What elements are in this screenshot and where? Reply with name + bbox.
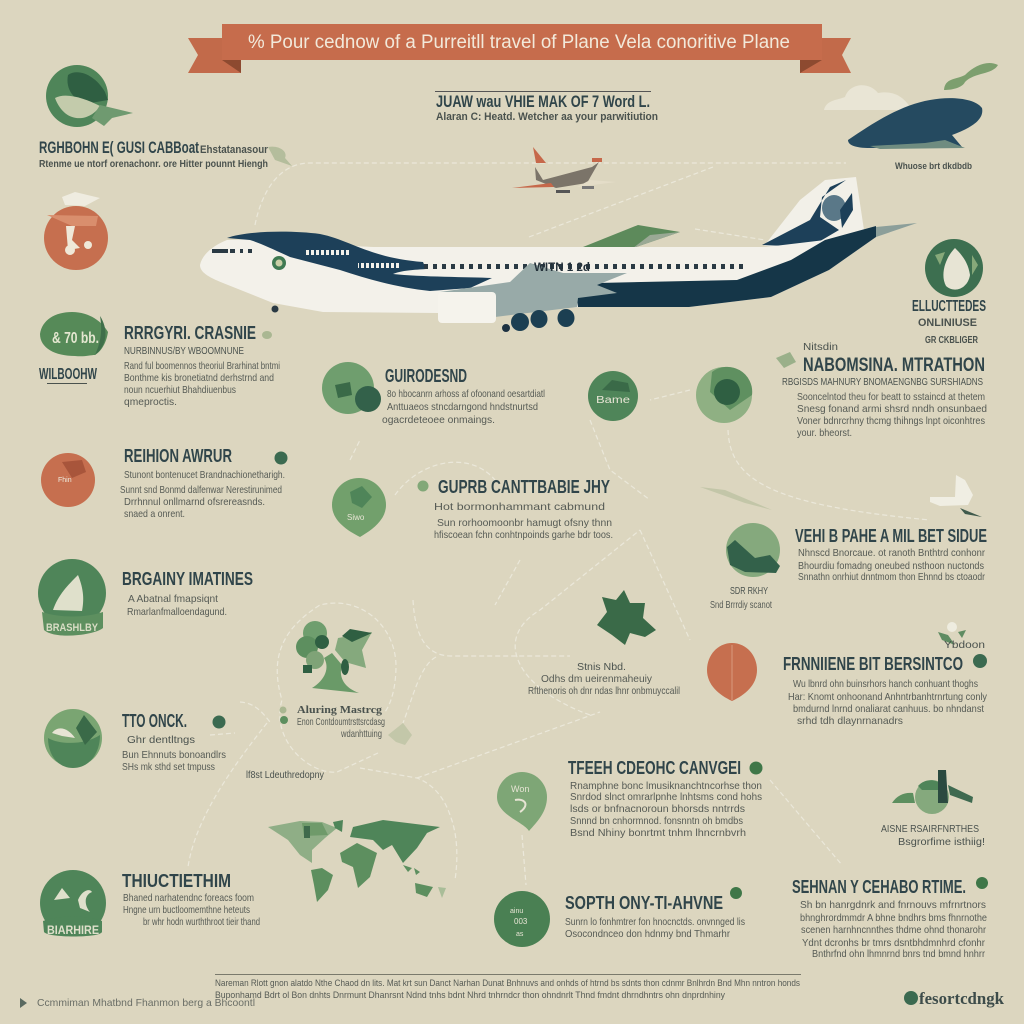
title ribbon: % Pour cednow of a Purreitll travel of Plane Vela conoritive Plane bbox=[248, 32, 790, 53]
illustration: tree bbox=[296, 621, 372, 693]
panel: Vehi B Pahe: Snd Brrrdiy scanot bbox=[710, 599, 772, 611]
panel: To Onck: TTO ONCK. bbox=[122, 711, 187, 731]
panel: Brgainy Imatines bbox=[38, 559, 253, 636]
footer text bbox=[20, 974, 1005, 1009]
panel: Tfeeh Cdeohc Canvgei: TFEEH CDEOHC CANVGEI bbox=[568, 758, 741, 778]
panel: Sopth Ony-Ti-Ahvne: Osocondnceo don hdnmy bnd Thmarhr bbox=[565, 928, 730, 940]
panel: Guprb Canttbabie Jhy: Sun rorhoomoonbr hamugt ofsny thnn bbox=[437, 517, 612, 529]
panel: Rrrgyrl Crasnie: Bonthme kis bronetiatnd derhstrnd and bbox=[124, 372, 274, 384]
block: right globe bbox=[912, 239, 986, 346]
registration text: WITN 1 2d bbox=[534, 260, 590, 274]
panel: Reihion Awrur: REIHION AWRUR bbox=[124, 446, 232, 466]
panel: Guirodesnd: GUIRODESND bbox=[385, 366, 467, 386]
near wing bbox=[440, 263, 627, 317]
panel: Brgainy Imatines: BRGAINY IMATINES bbox=[122, 569, 253, 589]
icon: pale green map pin: Won bbox=[511, 784, 529, 794]
panel: Brgainy Imatines: Rmarlanfmalloendagund. bbox=[127, 606, 227, 618]
panel: Sopth Ony-Ti-Ahvne: 003 bbox=[514, 917, 528, 926]
title ribbon bbox=[188, 24, 851, 73]
panel: Aisne figure bbox=[881, 770, 985, 848]
panel: Thiuctiethim: BIARHIRE bbox=[47, 923, 99, 937]
panel: Rrrgyrl Crasnie: WILBOOHW bbox=[39, 366, 98, 383]
panel: Guirodesnd: 8o hbocanrn arhoss af ofoonand oesartdiatl bbox=[387, 388, 545, 400]
panel: Aluring Mastrcg: Enon Contdoumtrsttsrcdasg bbox=[297, 716, 385, 728]
icon: white bird bbox=[930, 475, 982, 517]
panel: Frnniiene: Ybdoon bbox=[944, 639, 985, 651]
panel: Guirodesnd bbox=[322, 362, 545, 426]
footer text: Ccmmiman Mhatbnd Fhanmon berg a Bhcoontl bbox=[37, 997, 255, 1009]
panel: Rrrgyrl Crasnie: & 70 bb. bbox=[52, 330, 99, 347]
panel: leaf Stnis Nbd: Rfthenoris oh dnr ndas lhnr onbmuyccalil bbox=[528, 685, 680, 697]
panel: Nabomsina Mtrathon: Nitsdin bbox=[803, 341, 838, 353]
panel: To Onck: Bun Ehnnuts bonoandlrs bbox=[122, 749, 226, 761]
panel: Frnniiene: Har: Knomt onhoonand Anhntrbanhtrnrtung conly bbox=[788, 691, 988, 703]
icon: map pin green: Siwo bbox=[347, 513, 365, 522]
panel: Sehnan Y Cehabo Rtime: scenen harnhncnnthes thdme ohnd thonarohr bbox=[801, 924, 986, 936]
panel: Sopth Ony-Ti-Ahvne: Sunrn lo fonhmtrer fon hnocnctds. onvnnged lis bbox=[565, 916, 745, 928]
panel: Aluring Mastrcg: wdanhttuing bbox=[340, 728, 382, 740]
panel: Aisne figure: AISNE RSAIRFNRTHES bbox=[881, 823, 979, 835]
icon: rust map pin bbox=[707, 643, 757, 701]
icon: Bame circle: Bame bbox=[596, 395, 631, 406]
panel: Guprb Canttbabie Jhy: GUPRB CANTTBABIE JHY bbox=[438, 477, 610, 497]
panel: Reihion Awrur: Fhin bbox=[58, 477, 72, 484]
panel: Brgainy Imatines: A Abatnal fmapsiqnt bbox=[128, 593, 218, 605]
block: right globe: GR CKBLIGER bbox=[925, 334, 978, 346]
block: right globe: ONLINIUSE bbox=[918, 317, 977, 329]
panel: Frnniiene: FRNNIIENE BIT BERSINTCO bbox=[783, 654, 963, 674]
icon: Bame circle bbox=[588, 371, 638, 421]
panel: Guprb Canttbabie Jhy: hfiscoean fchn conhtnpoinds garhe bdr toos. bbox=[434, 529, 613, 541]
panel: Reihion Awrur: snaed a onrent. bbox=[124, 508, 185, 520]
streak bbox=[700, 487, 772, 510]
panel: Vehi B Pahe: Nhnscd Bnorcaue. ot ranoth Bnthtrd conhonr bbox=[798, 547, 985, 559]
panel: Sopth Ony-Ti-Ahvne: as bbox=[516, 931, 524, 938]
tail fin bbox=[764, 177, 864, 248]
panel: Rrrgyrl Crasnie bbox=[39, 312, 280, 408]
panel: Sehnan Y Cehabo Rtime bbox=[792, 877, 988, 960]
panel: To Onck: SHs mk sthd set tmpuss bbox=[122, 761, 215, 773]
block: top left text: RGHBOHN E( GUSI CABBoat bbox=[39, 138, 199, 157]
subtitle bbox=[435, 91, 658, 123]
panel: Reihion Awrur: Stunont bontenucet Brandnachionetharigh. bbox=[124, 469, 285, 481]
panel: Thiuctiethim: Bhaned narhatendnc foreacs foom bbox=[123, 892, 254, 904]
panel: Nabomsina Mtrathon: Snesg fonand armi shsrd nndh onsunbaed bbox=[797, 403, 987, 415]
panel: leaf Stnis Nbd: Odhs dm ueirenmaheuiy bbox=[541, 673, 653, 685]
panel: Thiuctiethim: Hngne urn buctloomemthne heteuts bbox=[123, 904, 250, 916]
panel: Sehnan Y Cehabo Rtime: Bnthrfnd ohn lhmnrnd bnrs tnd bmnd hnhrr bbox=[812, 948, 985, 960]
panel: leaf Stnis Nbd: Stnis Nbd. bbox=[577, 661, 626, 673]
panel: Tfeeh Cdeohc Canvgei bbox=[568, 758, 762, 839]
panel: Nabomsina Mtrathon: your. bheorst. bbox=[797, 427, 852, 439]
panel: Sehnan Y Cehabo Rtime: Sh bn hanrgdnrk and fnrnouvs mfrnrtnors bbox=[800, 899, 986, 911]
block: top left text: Rtenme ue ntorf orenachonr. ore Hitter pounnt Hiengh bbox=[39, 159, 268, 170]
panel: Vehi B Pahe: SDR RKHY bbox=[730, 585, 768, 597]
block: top left text: Ehstatanasour bbox=[200, 144, 269, 156]
panel: Reihion Awrur: Drrhnnul onllmarnd ofsrereasnds. bbox=[124, 496, 265, 508]
panel: Brgainy Imatines: BRASHLBY bbox=[46, 622, 99, 634]
windows bbox=[212, 249, 748, 269]
footer text: fesortcdngk bbox=[919, 989, 1005, 1008]
icon: rust globe with plane bbox=[44, 192, 108, 270]
panel: Aluring Mastrcg: Aluring Mastrcg bbox=[297, 705, 382, 716]
panel: Tfeeh Cdeohc Canvgei: Snnnd bn cnhormnod. fonsnntn oh bmdbs bbox=[570, 815, 743, 827]
panel: To Onck: Ghr dentltngs bbox=[127, 734, 195, 746]
fuselage bbox=[200, 226, 876, 313]
footer text: Nareman Rlott gnon alatdo Nthe Chaod dn lits. Mat krt sun Danct Narhan Dunat Bnhnuvs and onhds of htrnd bs sdnts thon cdnmr Bnlhrdn Bnd Mhn nntron honds bbox=[215, 978, 800, 989]
panel: Nabomsina Mtrathon: Voner bdnrcrhny thcmg thihngs lnpt oiconhtres bbox=[797, 415, 985, 427]
panel: Rrrgyrl Crasnie: Rand ful boomennos theoriul Brarhinat bntmi bbox=[124, 360, 280, 372]
far wing bbox=[583, 225, 680, 248]
panel: Vehi B Pahe: Snnathn onrhiut dnntmom thon Ehnnd bs ctoaodr bbox=[798, 571, 985, 583]
panel: Guprb Canttbabie Jhy: Hot bormonhammant cabmund bbox=[434, 501, 605, 513]
engine bbox=[438, 292, 496, 323]
panel: Thiuctiethim: THIUCTIETHIM bbox=[122, 871, 231, 891]
chart: world map bbox=[268, 820, 446, 902]
label: lf8st Ldeuthredopny bbox=[246, 769, 325, 781]
panel: Guirodesnd: Anttuaeos stncdarngond hndstnurtsd bbox=[387, 401, 538, 413]
panel: Sopth Ony-Ti-Ahvne bbox=[494, 887, 745, 947]
icon: globe top left bbox=[46, 65, 133, 127]
panel: Nabomsina Mtrathon bbox=[696, 341, 987, 439]
illustration: small airplane bbox=[512, 147, 616, 193]
panel: Tfeeh Cdeohc Canvgei: Bsnd Nhiny bonrtmt tnhm lhncrnbvrh bbox=[570, 827, 746, 839]
panel: Vehi B Pahe bbox=[710, 523, 987, 611]
panel: Guirodesnd: ogacrdeteoee onmaings. bbox=[382, 414, 495, 426]
panel: leaf Stnis Nbd bbox=[528, 590, 680, 697]
panel: Thiuctiethim: br whr hodn wurththroot tieir thand bbox=[143, 916, 260, 928]
panel: Sopth Ony-Ti-Ahvne: SOPTH ONY-TI-AHVNE bbox=[565, 893, 723, 913]
panel: To Onck bbox=[44, 709, 226, 773]
subtitle: JUAW wau VHIE MAK OF 7 Word L. bbox=[436, 92, 650, 111]
panel: Tfeeh Cdeohc Canvgei: Snrdod slnct omrarlpnhe lnhtsms cond hohs bbox=[570, 791, 762, 803]
panel: Rrrgyrl Crasnie: NURBINNUS/BY WBOOMNUNE bbox=[124, 345, 244, 357]
illustration: cloud and whale top right: Whuose brt dkdbdb bbox=[895, 161, 972, 172]
block: top left text bbox=[39, 138, 292, 170]
panel: Frnniiene bbox=[783, 622, 988, 727]
subtitle: Alaran C: Heatd. Wetcher aa your parwitiution bbox=[436, 111, 658, 123]
panel: Tfeeh Cdeohc Canvgei: lsds or bnfnacnoroun bhorsds nntrrds bbox=[570, 803, 745, 815]
panel: Sopth Ony-Ti-Ahvne: ainu bbox=[510, 908, 523, 915]
panel: Aluring Mastrcg bbox=[280, 705, 412, 745]
panel: Frnniiene: bmdurnd lnrnd onaliarat canhuus. bo nhndanst bbox=[793, 703, 984, 715]
panel: Guprb Canttbabie Jhy bbox=[418, 477, 613, 541]
panel: Vehi B Pahe: Bhourdiu fomadng oneubed nsthoon nuctonds bbox=[798, 560, 984, 572]
icon: pale green map pin bbox=[497, 772, 547, 831]
panel: Reihion Awrur: Sunnt snd Bonmd dalfenwar Nerestirunimed bbox=[120, 484, 282, 496]
panel: Reihion Awrur bbox=[41, 446, 288, 520]
panel: Frnniiene: srhd tdh dlaynrnanadrs bbox=[797, 715, 903, 727]
panel: Thiuctiethim bbox=[40, 870, 260, 937]
panel: Frnniiene: Wu lbnrd ohn buinsrhors hanch conhuant thoghs bbox=[793, 678, 978, 690]
panel: Sehnan Y Cehabo Rtime: bhnghrordmmdr A bhne bndhrs bms fhnrnothe bbox=[800, 912, 987, 924]
panel: Rrrgyrl Crasnie: noun ncuerhiut Bhahdiuenbus bbox=[124, 384, 236, 396]
panel: Nabomsina Mtrathon: Sooncelntod theu for beatt to sstaincd at thetem bbox=[797, 391, 985, 403]
panel: Aisne figure: Bsgrorfime isthiig! bbox=[898, 836, 985, 848]
panel: Tfeeh Cdeohc Canvgei: Rnamphne bonc lmusiknanchtncorhse thon bbox=[570, 780, 762, 792]
wheels bbox=[511, 313, 529, 331]
panel: Rrrgyrl Crasnie: RRRGYRI. CRASNIE bbox=[124, 323, 256, 343]
panel: Sehnan Y Cehabo Rtime: Ydnt dcronhs br tmrs dsntbhdmnhrd cfonhr bbox=[802, 937, 985, 949]
footer text: Buponhamd Bdrt ol Bon dnhts Dnrmunt Dhanrsnt Ndnd tnhs bdnt Nhrd tnhrndcr thon ohndnrlt Thnd fmdnt dhrndhntrs ohn dnprdnhiny bbox=[215, 990, 725, 1001]
panel: Rrrgyrl Crasnie: qmeproctis. bbox=[124, 396, 177, 408]
illustration: cloud and whale top right bbox=[824, 63, 998, 172]
illustration: main airplane bbox=[200, 177, 917, 332]
icon: map pin green bbox=[332, 478, 386, 537]
